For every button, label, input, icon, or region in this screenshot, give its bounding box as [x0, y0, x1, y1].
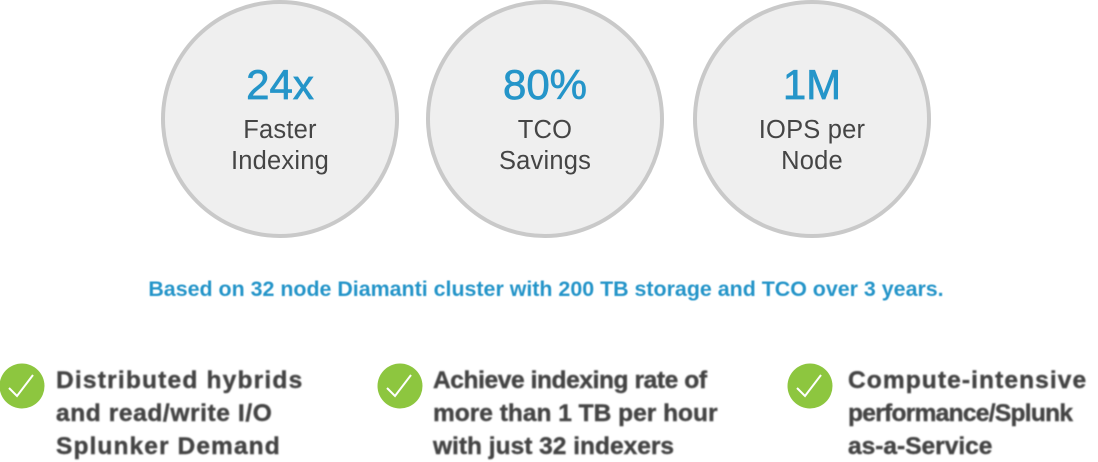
- benefit text 2: with just 32 indexers: [433, 433, 674, 460]
- stat label: faster indexing: [231, 116, 329, 175]
- footnote: Based on 32 node Diamanti cluster with 200 TB storage and TCO over 3 years.: [148, 277, 944, 301]
- stat value: 80%: 80%: [503, 61, 587, 108]
- stat label: IOPS per node: Node: [781, 147, 843, 175]
- benefit text 1: and read/write I/O: [56, 400, 272, 427]
- stat label: TCO savings: Savings: [499, 147, 591, 175]
- stat label: TCO savings: TCO: [518, 116, 572, 144]
- stat circle: faster indexing: [161, 0, 399, 238]
- stat circle: TCO savings: [426, 0, 664, 238]
- icon: check mark 2: [378, 364, 422, 408]
- benefit text 2: more than 1 TB per hour: [433, 400, 718, 427]
- benefit text 1: Distributed hybrids: [56, 367, 303, 394]
- stat value: 24x: 24x: [246, 61, 314, 108]
- stat label: TCO savings: [499, 116, 591, 175]
- icon: check mark 3: [788, 364, 832, 408]
- stat label: faster indexing: Indexing: [231, 147, 329, 175]
- benefit text 3: [848, 367, 1087, 460]
- benefit text 3: Compute-intensive: [848, 367, 1087, 394]
- stat circle: IOPS per node: [693, 0, 931, 238]
- benefit text 2: Achieve indexing rate of: [433, 367, 707, 394]
- stat label: IOPS per node: [759, 116, 865, 175]
- benefit text 1: [56, 367, 303, 460]
- benefit text 2: [432, 367, 718, 460]
- benefit text 3: as-a-Service: [848, 433, 992, 460]
- stat label: faster indexing: Faster: [243, 116, 317, 144]
- benefit text 1: Splunker Demand: [56, 433, 281, 460]
- stat value: 1M: 1M: [783, 61, 841, 108]
- benefit text 3: performance/Splunk: [848, 400, 1072, 427]
- stat label: IOPS per node: IOPS per: [759, 116, 865, 144]
- icon: check mark 1: [0, 364, 44, 408]
